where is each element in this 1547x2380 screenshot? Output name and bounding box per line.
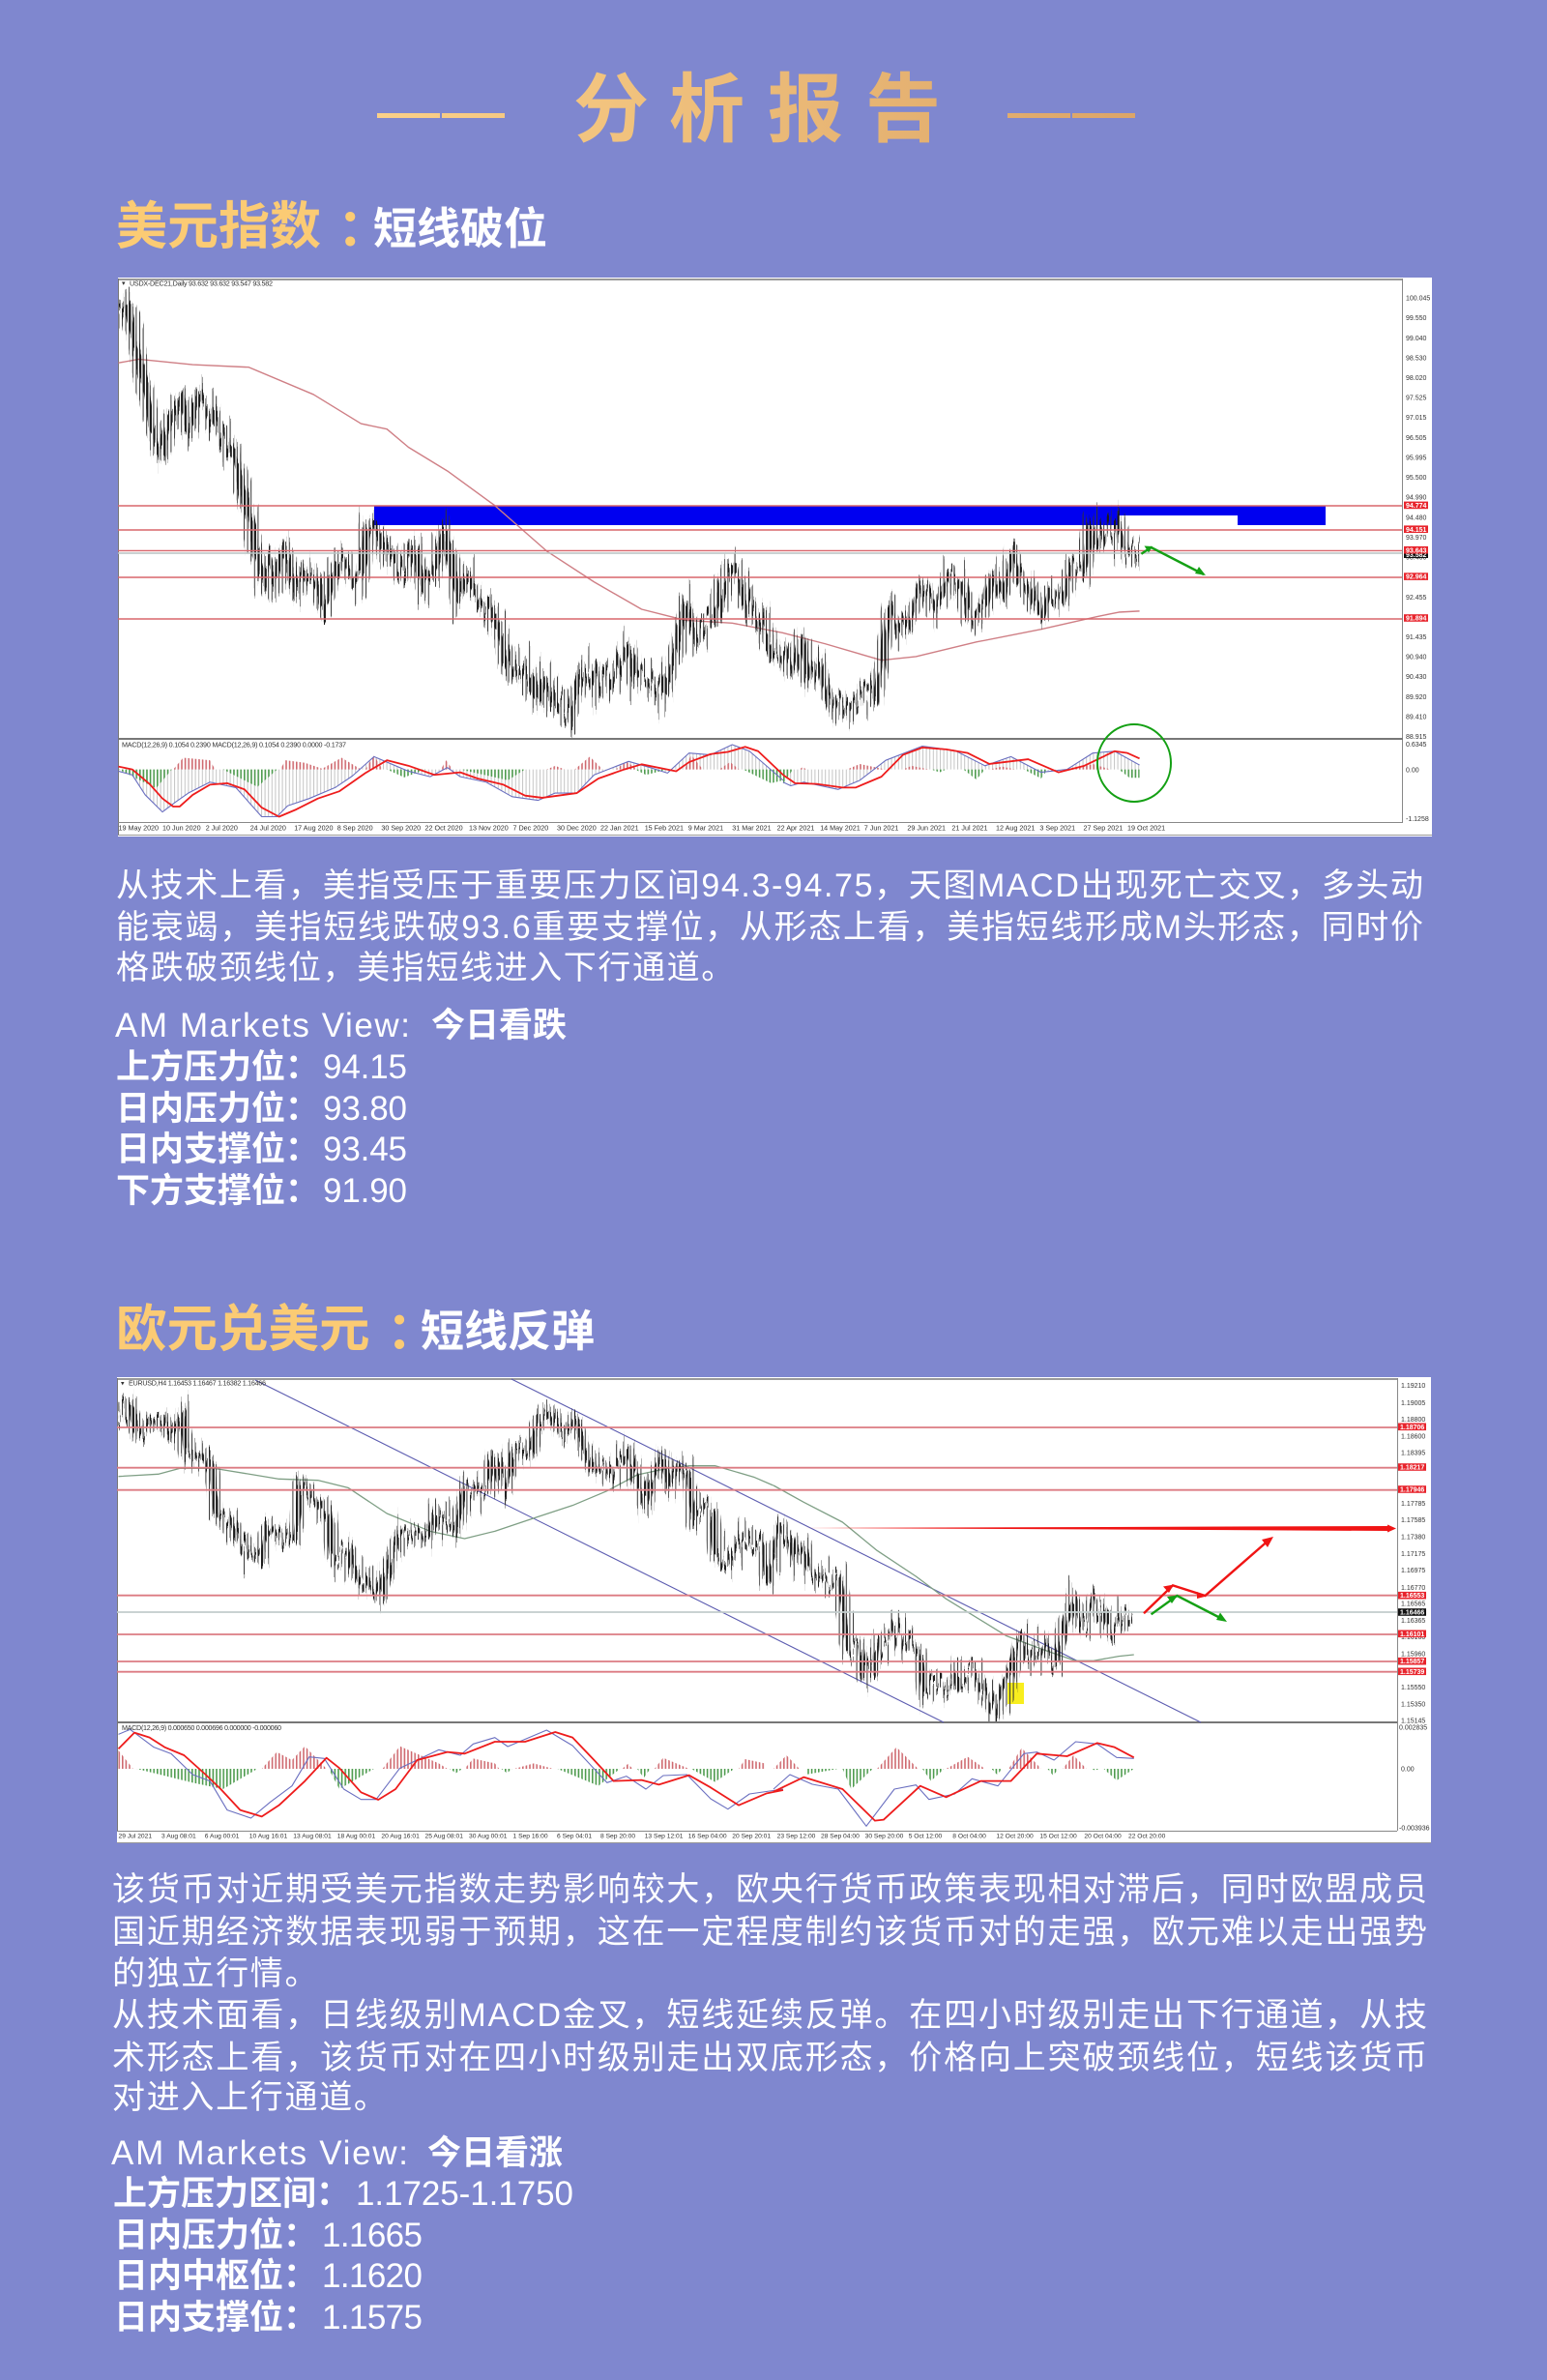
heading: US dollar index: 美元指数: [116, 198, 321, 255]
price axis labels: 98.530: [1406, 356, 1427, 362]
time axis labels: 19 May 2020: [118, 824, 159, 832]
key levels: EURUSD: AM Markets View:: [111, 2134, 408, 2172]
chart header labels: [122, 279, 346, 749]
chart panel: EURUSD H4: [117, 1377, 1431, 1843]
moving average line: [119, 1466, 1134, 1660]
time axis labels: 3 Aug 08:01: [161, 1834, 196, 1839]
time axis labels: 16 Sep 04:00: [688, 1834, 727, 1839]
heading: US dollar index: 短线破位: [373, 204, 547, 253]
price axis labels: 94.151: [1406, 527, 1427, 534]
price axis labels: 93.643: [1406, 547, 1427, 554]
horizontal price levels: [117, 1427, 1397, 1672]
chart header labels: USDX-DEC21,Daily 93.632 93.632 93.547 93.582: [130, 279, 273, 288]
text block: USDX analysis: 格跌破颈线位，美指短线进入下行通道。: [116, 950, 736, 986]
arrow: red projection up: [1144, 1537, 1273, 1613]
price axis labels: 1.15960: [1401, 1652, 1425, 1658]
price axis labels: 1.18600: [1401, 1433, 1425, 1441]
resistance zone: [374, 506, 1326, 525]
time axis labels: [118, 1834, 1166, 1839]
time axis labels: 28 Sep 04:00: [821, 1834, 860, 1839]
key levels: USDX: 日内压力位：: [116, 1090, 319, 1128]
price axis labels: -0.003936: [1399, 1826, 1430, 1832]
time axis labels: 7 Jun 2021: [864, 824, 898, 832]
key levels: EURUSD: 1.1725-1.1750: [356, 2175, 573, 2213]
heading: US dollar index: ：: [337, 200, 389, 257]
time axis labels: 6 Aug 00:01: [205, 1834, 240, 1839]
time axis labels: 17 Aug 2020: [294, 824, 334, 832]
price axis labels: 89.410: [1406, 714, 1427, 721]
price axis labels: 97.015: [1406, 415, 1427, 422]
time axis labels: 10 Aug 16:01: [249, 1834, 287, 1839]
heading: EURUSD: 欧元兑美元: [116, 1301, 370, 1358]
key levels: EURUSD: [111, 2134, 573, 2336]
key levels: EURUSD: 上方压力区间：: [113, 2175, 350, 2213]
price axis labels: 1.16160: [1401, 1634, 1425, 1641]
heading: EURUSD: [116, 1301, 595, 1360]
key levels: USDX: 93.45: [323, 1131, 407, 1168]
time axis labels: 30 Sep 20:00: [865, 1834, 904, 1839]
time axis labels: 5 Oct 12:00: [909, 1834, 943, 1839]
channel trend lines: [255, 1379, 1201, 1722]
price axis labels: 1.18800: [1401, 1417, 1425, 1424]
text block: EURUSD analysis: 的独立行情。: [112, 1955, 319, 1992]
time axis labels: 22 Apr 2021: [777, 824, 814, 832]
candlesticks: [119, 1405, 1132, 1709]
key levels: USDX: 今日看跌: [431, 1007, 567, 1044]
heading: EURUSD: 短线反弹: [421, 1307, 595, 1356]
price axis labels: 1.16565: [1401, 1601, 1425, 1607]
time axis labels: 20 Aug 16:01: [381, 1834, 420, 1839]
time axis labels: 22 Oct 2020: [425, 824, 463, 832]
price axis labels: 1.19005: [1401, 1400, 1425, 1407]
price axis labels: 1.15145: [1401, 1718, 1425, 1725]
key levels: USDX: [115, 1007, 567, 1210]
title: 分析报告: [573, 67, 941, 152]
price axis labels: 91.435: [1406, 634, 1427, 641]
chart header labels: MACD(12,26,9) 0.000650 0.000696 0.000000 -0.000060: [122, 1723, 281, 1732]
price axis labels: 93.970: [1406, 535, 1427, 542]
price axis labels: 92.455: [1406, 595, 1427, 602]
price axis labels: 93.582: [1406, 552, 1427, 559]
text block: EURUSD analysis: 该货币对近期受美元指数走势影响较大，欧央行货币政策表现相对滞后，同时欧盟成员: [112, 1871, 1427, 1908]
price axis labels: 1.16770: [1401, 1585, 1425, 1592]
time axis labels: 14 May 2021: [820, 824, 861, 832]
key levels: EURUSD: 今日看涨: [427, 2134, 563, 2172]
price axis labels: 100.045: [1406, 296, 1430, 303]
horizontal price levels: [118, 506, 1402, 619]
key levels: EURUSD: 1.1620: [322, 2257, 423, 2295]
heading: US dollar index: [116, 198, 547, 257]
key levels: USDX: 91.90: [323, 1172, 407, 1210]
chart header labels: ▾: [121, 1379, 125, 1387]
time axis labels: 15 Oct 12:00: [1039, 1834, 1077, 1839]
time axis labels: 3 Sep 2021: [1039, 824, 1075, 832]
chart header labels: [121, 1379, 281, 1732]
text block: EURUSD analysis: 从技术面看，日线级别MACD金叉，短线延续反弹。在四小时级别走出下行通道，从技: [112, 1997, 1427, 2034]
price axis labels: 88.915: [1406, 734, 1427, 741]
price axis labels: 1.18217: [1400, 1464, 1424, 1472]
time axis labels: 27 Sep 2021: [1083, 824, 1123, 832]
callout: green circle on MACD: [1097, 724, 1171, 802]
MACD histogram and lines: [119, 1729, 1134, 1826]
price axis labels: 0.00: [1406, 768, 1419, 774]
arrow: green projection down: [1141, 545, 1206, 575]
text block: USDX analysis: 从技术上看，美指受压于重要压力区间94.3-94.75，天图MACD出现死亡交叉，多头动: [116, 867, 1423, 904]
time axis labels: 23 Sep 12:00: [777, 1834, 816, 1839]
time axis labels: 12 Aug 2021: [996, 824, 1035, 832]
price axis labels: 91.894: [1406, 616, 1427, 623]
price axis labels: 89.920: [1406, 694, 1427, 701]
time axis labels: 21 Jul 2021: [951, 824, 988, 832]
price axis labels: 97.525: [1406, 395, 1427, 402]
time axis labels: [118, 824, 1165, 832]
marker: yellow highlight: [1007, 1683, 1024, 1704]
arrow: green projection down: [1152, 1596, 1227, 1622]
key levels: USDX: AM Markets View:: [115, 1007, 410, 1044]
chart header labels: ▾: [122, 279, 126, 287]
text block: EURUSD analysis: 国近期经济数据表现弱于预期，这在一定程度制约该货币对的走强，欧元难以走出强势: [112, 1914, 1427, 1951]
time axis labels: 15 Feb 2021: [645, 824, 684, 832]
time axis labels: 29 Jun 2021: [907, 824, 946, 832]
time axis labels: 30 Aug 00:01: [469, 1834, 508, 1839]
key levels: EURUSD: 1.1665: [322, 2217, 423, 2254]
price axis labels: 1.15857: [1400, 1659, 1424, 1665]
price axis labels: 90.940: [1406, 654, 1427, 661]
time axis labels: 31 Mar 2021: [732, 824, 772, 832]
chart header labels: EURUSD,H4 1.16453 1.16467 1.16382 1.16466: [129, 1379, 266, 1387]
text block: EURUSD analysis: 术形态上看，该货币对在四小时级别走出双底形态，价格向上突破颈线位，短线该货币: [112, 2040, 1427, 2076]
price axis labels: 94.990: [1406, 495, 1427, 502]
MACD histogram and lines: [119, 745, 1140, 817]
price axis labels: 93.460: [1406, 555, 1427, 562]
price axis labels: 99.550: [1406, 315, 1427, 322]
heading: EURUSD: ：: [387, 1303, 438, 1360]
time axis labels: 8 Sep 2020: [337, 824, 373, 832]
price axis labels: 1.18395: [1401, 1451, 1425, 1456]
price axis labels: 98.020: [1406, 375, 1427, 382]
time axis labels: 1 Sep 16:00: [512, 1834, 548, 1839]
price axis labels: 92.964: [1406, 574, 1427, 581]
price axis labels: 1.19210: [1401, 1383, 1425, 1390]
price axis labels: 1.17946: [1400, 1487, 1424, 1493]
price axis labels: 95.995: [1406, 455, 1427, 462]
price axis labels: 1.17585: [1401, 1517, 1425, 1524]
chart panel: USDX daily: [118, 278, 1432, 837]
time axis labels: 18 Aug 00:01: [337, 1834, 375, 1839]
key levels: USDX: 上方压力位：: [116, 1048, 319, 1086]
candlesticks: [119, 308, 1140, 715]
time axis labels: 25 Aug 08:01: [425, 1834, 463, 1839]
price axis labels: [1398, 1383, 1430, 1832]
time axis labels: 30 Sep 2020: [381, 824, 421, 832]
time axis labels: 7 Dec 2020: [512, 824, 548, 832]
price axis labels: 1.16975: [1401, 1568, 1425, 1574]
price axis labels: 1.18706: [1400, 1425, 1424, 1431]
text block: EURUSD analysis: [112, 1871, 1427, 2116]
price axis labels: 94.480: [1406, 514, 1427, 521]
chart header labels: MACD(12,26,9) 0.1054 0.2390 MACD(12,26,9) 0.1054 0.2390 0.0000 -0.1737: [122, 741, 346, 749]
text block: USDX analysis: [116, 867, 1423, 986]
price axis labels: 0.00: [1401, 1766, 1415, 1774]
price axis labels: 1.16466: [1400, 1609, 1424, 1617]
price axis labels: 99.040: [1406, 336, 1427, 342]
key levels: USDX: 93.80: [323, 1090, 407, 1128]
price axis labels: 96.505: [1406, 435, 1427, 442]
price axis labels: 1.17175: [1401, 1551, 1425, 1558]
time axis labels: 22 Oct 20:00: [1128, 1834, 1166, 1839]
time axis labels: 8 Sep 20:00: [600, 1834, 635, 1839]
time axis labels: 29 Jul 2021: [118, 1834, 152, 1839]
time axis labels: 13 Aug 08:01: [293, 1834, 332, 1839]
key levels: USDX: 日内支撑位：: [116, 1131, 319, 1168]
time axis labels: 20 Oct 04:00: [1084, 1834, 1122, 1839]
time axis labels: 30 Dec 2020: [557, 824, 597, 832]
price axis labels: 95.500: [1406, 475, 1427, 482]
price axis labels: 1.15550: [1401, 1685, 1425, 1691]
key levels: USDX: 94.15: [323, 1048, 407, 1086]
time axis labels: 12 Oct 20:00: [996, 1834, 1034, 1839]
time axis labels: 9 Mar 2021: [688, 824, 723, 832]
price axis labels: 0.002835: [1399, 1725, 1427, 1731]
time axis labels: 10 Jun 2020: [162, 824, 201, 832]
price axis labels: 1.16365: [1401, 1618, 1425, 1625]
text block: EURUSD analysis: 对进入上行通道。: [112, 2079, 389, 2116]
title: [377, 67, 1135, 152]
price axis labels: 1.15350: [1401, 1702, 1425, 1708]
price axis labels: 0.6345: [1406, 742, 1427, 749]
price axis labels: 1.17380: [1401, 1534, 1425, 1542]
key levels: USDX: 下方支撑位：: [116, 1172, 319, 1210]
time axis labels: 19 Oct 2021: [1127, 824, 1165, 832]
price axis labels: 1.17785: [1401, 1501, 1425, 1508]
arrow: red target line: [803, 1524, 1396, 1532]
time axis labels: 8 Oct 04:00: [952, 1834, 986, 1839]
time axis labels: 20 Sep 20:01: [732, 1834, 771, 1839]
time axis labels: 13 Nov 2020: [469, 824, 509, 832]
price axis labels: 1.16553: [1400, 1593, 1424, 1600]
price axis labels: 1.16101: [1400, 1631, 1424, 1638]
price axis labels: 90.430: [1406, 674, 1427, 681]
price axis labels: 1.15739: [1400, 1669, 1424, 1676]
key levels: EURUSD: 1.1575: [322, 2299, 423, 2336]
key levels: EURUSD: 日内支撑位：: [114, 2299, 317, 2336]
price axis labels: -1.1258: [1406, 816, 1429, 823]
price axis labels: 94.774: [1406, 503, 1427, 510]
moving average line: [119, 359, 1140, 661]
price axis labels: [1404, 296, 1430, 823]
time axis labels: 2 Jul 2020: [206, 824, 238, 832]
key levels: EURUSD: 日内中枢位：: [114, 2257, 317, 2295]
time axis labels: 24 Jul 2020: [250, 824, 286, 832]
text block: USDX analysis: 能衰竭，美指短线跌破93.6重要支撑位，从形态上看，美指短线形成M头形态，同时价: [116, 909, 1423, 946]
time axis labels: 6 Sep 04:01: [557, 1834, 592, 1839]
time axis labels: 22 Jan 2021: [600, 824, 639, 832]
time axis labels: 13 Sep 12:01: [645, 1834, 684, 1839]
key levels: EURUSD: 日内压力位：: [114, 2217, 317, 2254]
